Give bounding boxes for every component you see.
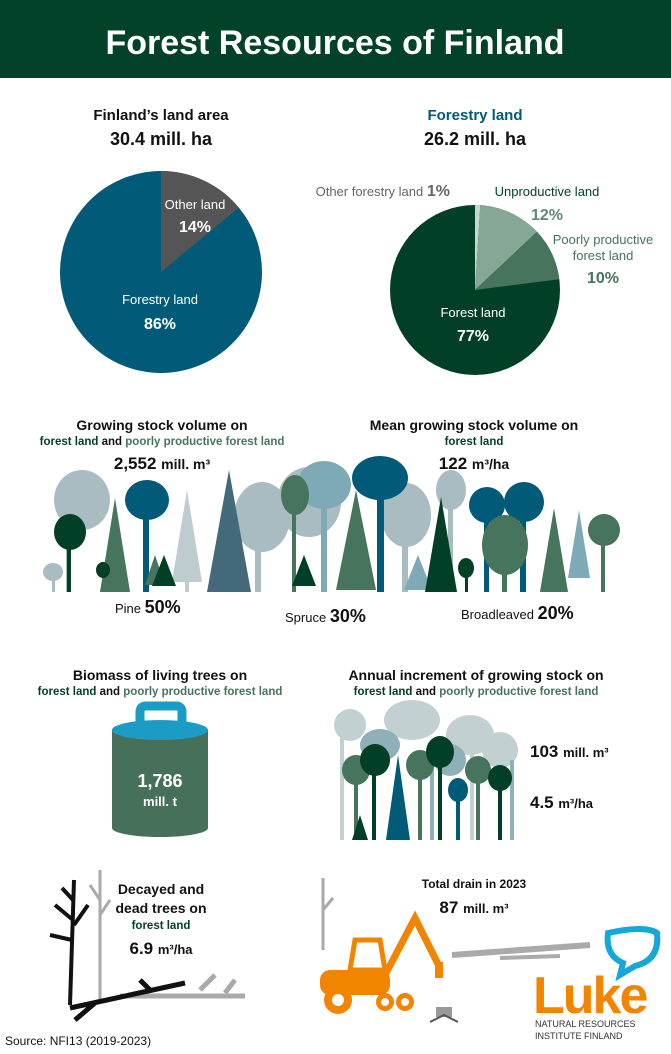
- icon: weight cylinder: mill. t: [143, 794, 178, 809]
- icon: weight cylinder: 1,786: [137, 771, 183, 791]
- header bar: [0, 0, 671, 78]
- text block: biomass: [38, 667, 282, 698]
- pie chart: forestry land: Unproductive land: [495, 184, 599, 199]
- pie chart: forestry land: [316, 183, 653, 375]
- text block: growing stock volume: [40, 417, 284, 473]
- text block: mean growing stock: [370, 417, 578, 473]
- illustration: increment forest: [334, 700, 518, 840]
- logo: Luke: Luke: [533, 967, 647, 1025]
- pie chart: land area: Forestry land: [122, 292, 198, 307]
- text block: mean growing stock: forest land: [445, 436, 503, 448]
- pie chart: land area: Other land: [165, 197, 225, 212]
- labels: species shares: Pine 50%: [115, 597, 181, 617]
- heading: forestry land: [424, 107, 527, 149]
- text block: mean growing stock: Mean growing stock volume on: [370, 417, 578, 433]
- text block: increment values: 4.5 m³/ha: [530, 793, 594, 812]
- text block: decayed trees: Decayed and: [118, 881, 204, 897]
- pie chart: forestry land: Forest land: [440, 305, 506, 320]
- text block: total drain: [422, 877, 527, 917]
- pie chart: land area: 86%: [144, 316, 176, 333]
- text block: total drain: 87 mill. m³: [439, 898, 509, 917]
- text block: annual increment: Annual increment of growing stock on: [348, 667, 604, 683]
- text block: total drain: Total drain in 2023: [422, 877, 527, 891]
- text block: biomass: forest land and poorly productive forest land: [38, 686, 282, 698]
- text block: annual increment: [348, 667, 604, 698]
- text block: growing stock volume: 2,552 mill. m³: [114, 454, 210, 473]
- icon: weight cylinder: [112, 706, 208, 837]
- illustration: forest: [43, 456, 620, 592]
- text block: growing stock volume: forest land and poorly productive forest land: [40, 436, 284, 448]
- text block: decayed trees: 6.9 m³/ha: [129, 939, 193, 958]
- pie chart: land area: [60, 171, 262, 373]
- heading: land area: [93, 107, 229, 149]
- heading: land area: Finland’s land area: [93, 107, 229, 124]
- pie chart: forestry land: forest land: [573, 248, 633, 263]
- pie chart: land area: 14%: [179, 219, 211, 236]
- pie chart: forestry land: Poorly productive: [553, 232, 653, 247]
- text block: mean growing stock: 122 m³/ha: [439, 454, 509, 473]
- text block: growing stock volume: Growing stock volume on: [76, 417, 248, 433]
- text block: decayed trees: forest land: [132, 920, 190, 932]
- heading: forestry land: 26.2 mill. ha: [424, 129, 527, 149]
- title: Forest Resources of Finland: [105, 24, 565, 62]
- icon: harvester: [320, 918, 443, 1014]
- text block: increment values: [530, 742, 609, 812]
- heading: land area: 30.4 mill. ha: [110, 129, 213, 149]
- logo: Luke: NATURAL RESOURCES: [535, 1019, 636, 1029]
- text block: decayed trees: [115, 881, 207, 958]
- labels: species shares: Spruce 30%: [285, 606, 366, 626]
- text block: decayed trees: dead trees on: [115, 900, 207, 916]
- pie chart: forestry land: 77%: [457, 328, 489, 345]
- icon: dead trees: [50, 870, 245, 1020]
- source note: Source: NFI13 (2019-2023): [5, 1034, 151, 1048]
- labels: species shares: [115, 597, 574, 626]
- labels: species shares: Broadleaved 20%: [461, 603, 574, 623]
- logo: Luke: INSTITUTE FINLAND: [535, 1031, 623, 1041]
- panel: land area: [60, 107, 262, 373]
- pie chart: forestry land: 12%: [531, 207, 563, 224]
- icon: stumps and logs: [323, 878, 590, 1022]
- text block: increment values: 103 mill. m³: [530, 742, 609, 761]
- panel: forestry land: [316, 107, 653, 375]
- logo: Luke: [533, 929, 657, 1041]
- pie chart: forestry land: 10%: [587, 270, 619, 287]
- text block: annual increment: forest land and poorly productive forest land: [354, 686, 598, 698]
- text block: biomass: Biomass of living trees on: [73, 667, 247, 683]
- heading: forestry land: Forestry land: [427, 107, 523, 124]
- pie chart: forestry land: Other forestry land 1%: [316, 183, 450, 200]
